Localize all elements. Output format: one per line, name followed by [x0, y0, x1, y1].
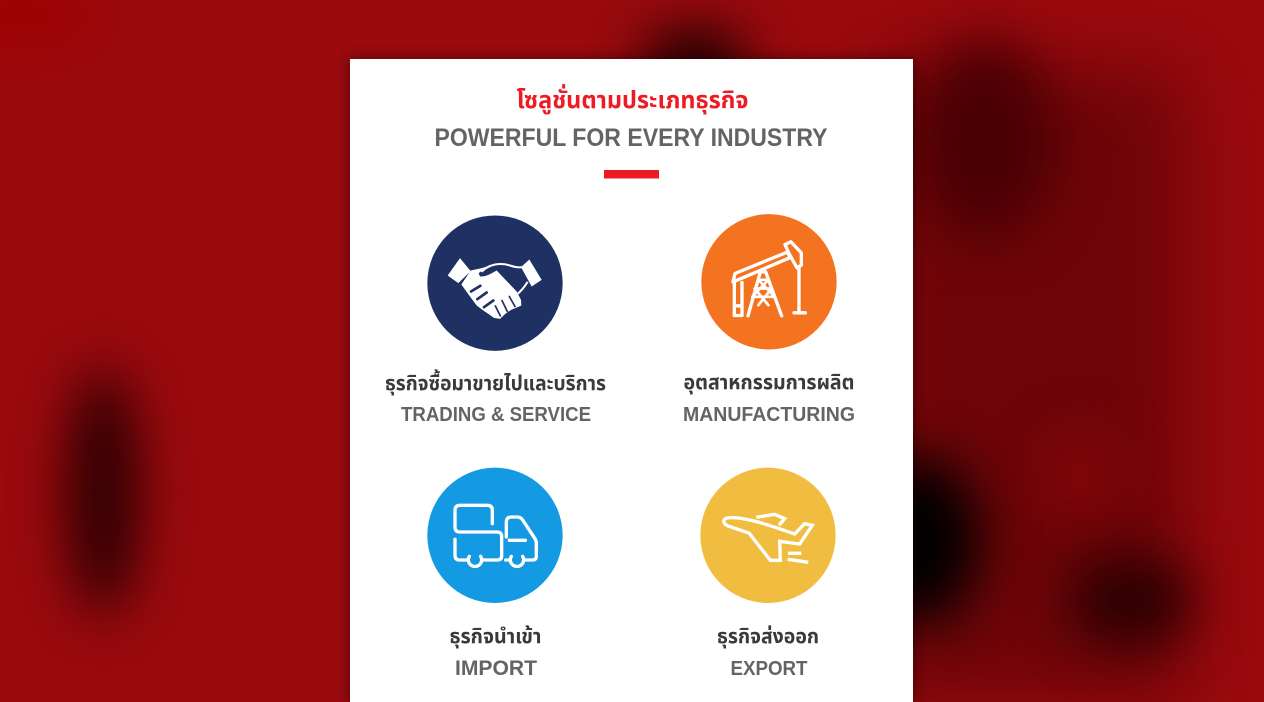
item: export	[700, 468, 836, 680]
item: import	[427, 468, 563, 680]
heading block	[434, 84, 828, 178]
label: Thai: ธุรกิจนำเข้า	[450, 626, 542, 648]
label: English: MANUFACTURING	[683, 404, 855, 426]
panel: white card	[350, 59, 913, 702]
icon: delivery truck	[427, 468, 563, 603]
label: Thai: อุตสาหกรรมการผลิต	[684, 372, 854, 394]
title: English: POWERFUL FOR EVERY INDUSTRY	[434, 124, 828, 152]
title: Thai: โซลูชั่นตามประเภทธุรกิจ	[516, 84, 748, 115]
label: English: EXPORT	[730, 658, 808, 680]
item: manufacturing	[683, 214, 855, 426]
label: Thai: ธุรกิจซื้อมาขายไปและบริการ	[385, 369, 606, 395]
icon: airplane	[700, 468, 836, 603]
item: trading and service	[385, 215, 606, 426]
label: English: TRADING & SERVICE	[401, 404, 591, 426]
icon: oil pump	[701, 214, 837, 349]
label: English: IMPORT	[455, 657, 537, 680]
red divider	[604, 170, 659, 178]
label: Thai: ธุรกิจส่งออก	[717, 626, 819, 648]
icon: handshake	[427, 215, 563, 351]
